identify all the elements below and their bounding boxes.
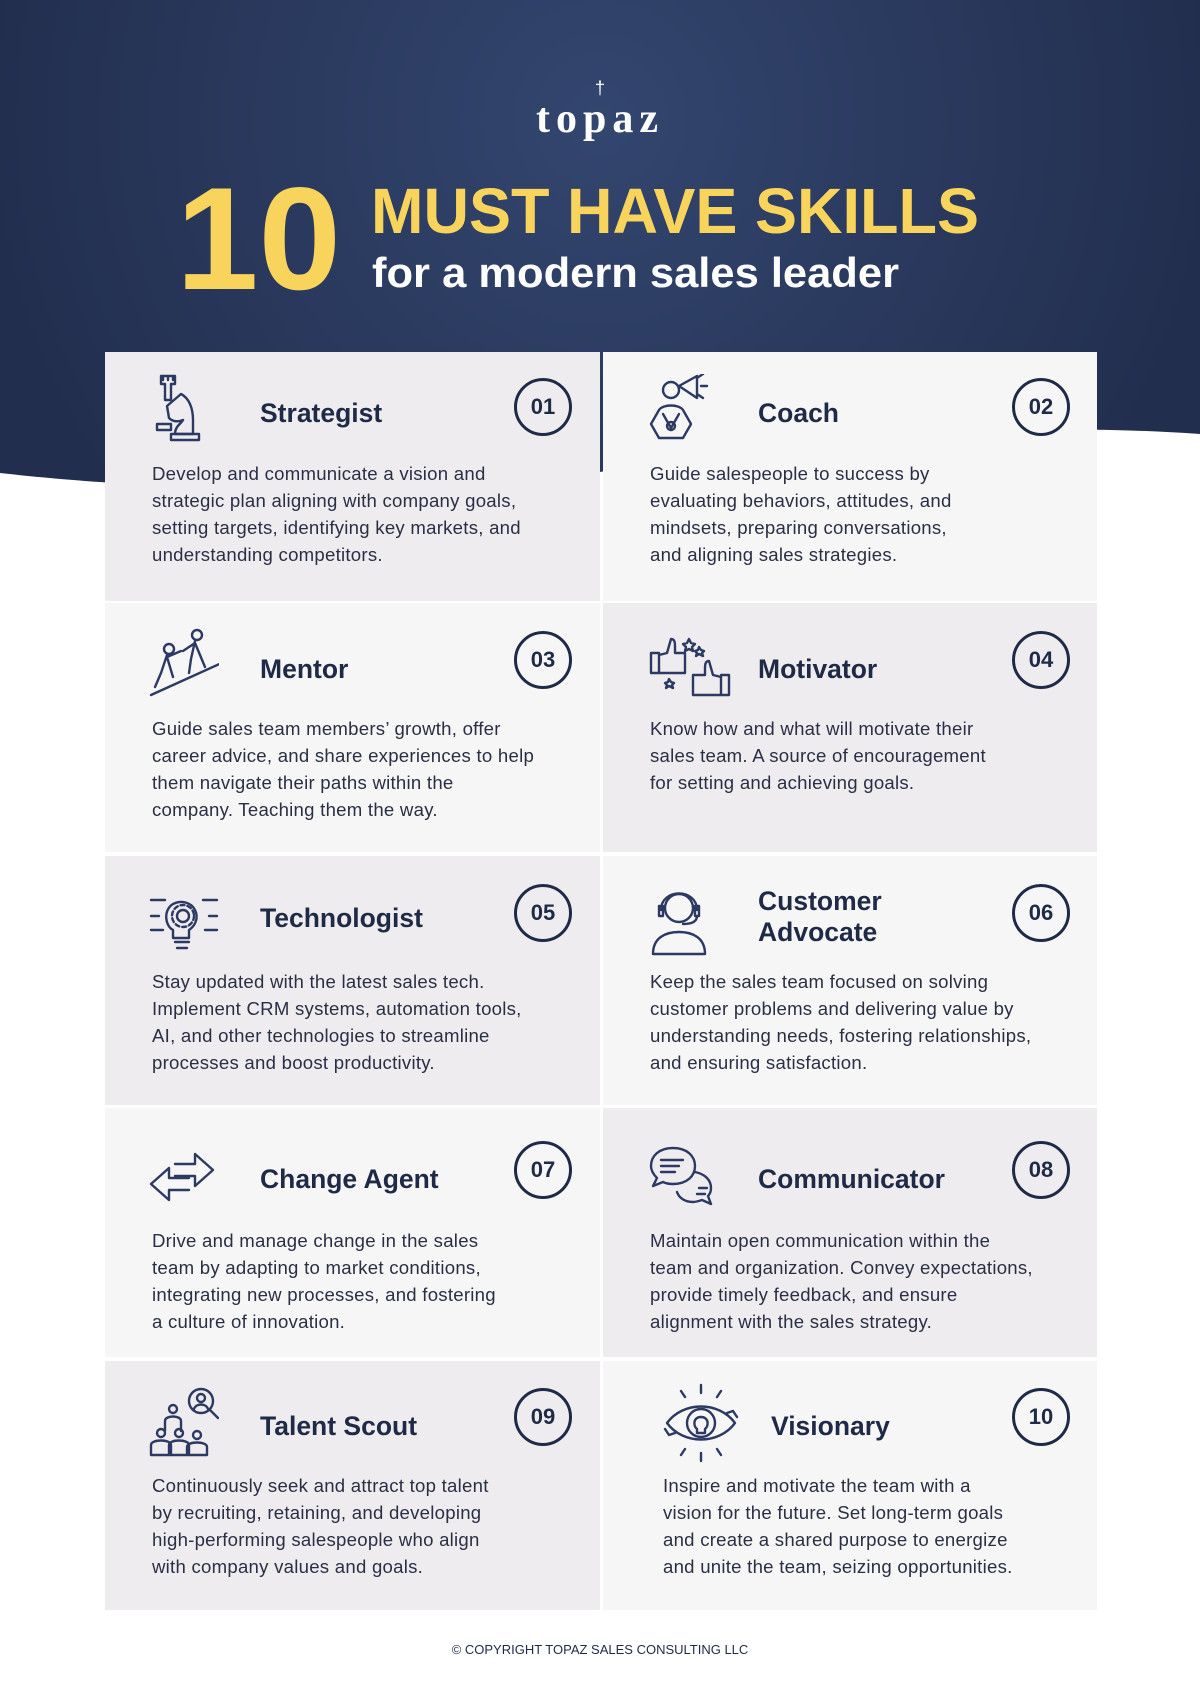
- icon: thumbs up with stars: [650, 638, 730, 696]
- logo: †: [595, 78, 605, 98]
- panel: 05 Technologist: [105, 856, 600, 1105]
- title: MUST HAVE SKILLS: [371, 175, 979, 247]
- text: Guide sales team members’ growth, offer: [152, 718, 501, 739]
- panel: 04 Motivator: [603, 603, 1097, 852]
- icon: eye with lightbulb: [664, 1384, 738, 1462]
- panel: 07 Change Agent: [105, 1108, 600, 1357]
- text: Maintain open communication within the: [650, 1230, 990, 1251]
- text: company. Teaching them the way.: [152, 799, 438, 820]
- number badge: 02: [1029, 394, 1053, 419]
- text: mindsets, preparing conversations,: [650, 517, 947, 538]
- header background: [0, 0, 1200, 482]
- title: Visionary: [771, 1411, 890, 1441]
- text: Develop and communicate a vision and: [152, 463, 486, 484]
- number badge: 05: [531, 900, 555, 925]
- text: Stay updated with the latest sales tech.: [152, 971, 484, 992]
- text: team by adapting to market conditions,: [152, 1257, 481, 1278]
- text: [152, 971, 522, 1073]
- title: [176, 160, 979, 310]
- title: for a modern sales leader: [372, 249, 899, 296]
- icon: climbing figures: [150, 628, 219, 696]
- number badge: [1012, 1141, 1070, 1199]
- icon: chess pieces: [156, 374, 200, 442]
- text: with company values and goals.: [152, 1556, 423, 1577]
- number badge: [514, 1388, 572, 1446]
- text: for setting and achieving goals.: [650, 772, 914, 793]
- panel: 10 Visionary: [603, 1361, 1097, 1610]
- text: Keep the sales team focused on solving: [650, 971, 988, 992]
- text: Drive and manage change in the sales: [152, 1230, 478, 1251]
- panel: 06 Customer Advocate: [603, 856, 1097, 1105]
- text: provide timely feedback, and ensure: [650, 1284, 957, 1305]
- text: alignment with the sales strategy.: [650, 1311, 932, 1332]
- text: them navigate their paths within the: [152, 772, 454, 793]
- number badge: [1012, 1388, 1070, 1446]
- text: and create a shared purpose to energize: [663, 1529, 1008, 1550]
- panel: 01 Strategist: [105, 352, 600, 601]
- text: evaluating behaviors, attitudes, and: [650, 490, 952, 511]
- number badge: 06: [1029, 900, 1053, 925]
- panel: 03 Mentor: [105, 603, 600, 852]
- text: setting targets, identifying key markets, and: [152, 517, 521, 538]
- number badge: 08: [1029, 1157, 1053, 1182]
- text: and ensuring satisfaction.: [650, 1052, 867, 1073]
- text: a culture of innovation.: [152, 1311, 345, 1332]
- text: processes and boost productivity.: [152, 1052, 435, 1073]
- title: Advocate: [758, 917, 877, 947]
- title: Motivator: [758, 654, 877, 684]
- text: Know how and what will motivate their: [650, 718, 973, 739]
- text: [152, 463, 521, 565]
- title: Change Agent: [260, 1164, 439, 1194]
- text: [650, 1230, 1033, 1332]
- number badge: [514, 378, 572, 436]
- title: Communicator: [758, 1164, 945, 1194]
- panel: 09 Talent Scout: [105, 1361, 600, 1610]
- text: [650, 718, 986, 793]
- title: Mentor: [260, 654, 348, 684]
- title: Strategist: [260, 398, 382, 428]
- text: team and organization. Convey expectations,: [650, 1257, 1033, 1278]
- text: by recruiting, retaining, and developing: [152, 1502, 481, 1523]
- text: strategic plan aligning with company goals,: [152, 490, 516, 511]
- number badge: [514, 631, 572, 689]
- icon: exchange arrows: [150, 1152, 214, 1202]
- logo: topaz: [536, 96, 664, 142]
- number badge: [1012, 378, 1070, 436]
- text: career advice, and share experiences to help: [152, 745, 534, 766]
- number badge: 07: [531, 1157, 555, 1182]
- text: [152, 1475, 489, 1577]
- number badge: 09: [531, 1404, 555, 1429]
- text: [663, 1475, 1013, 1577]
- text: Implement CRM systems, automation tools,: [152, 998, 522, 1019]
- text: Guide salespeople to success by: [650, 463, 930, 484]
- text: [152, 1230, 496, 1332]
- text: and aligning sales strategies.: [650, 544, 897, 565]
- number badge: 04: [1029, 647, 1053, 672]
- number badge: [1012, 631, 1070, 689]
- text: [152, 718, 534, 820]
- panel: 08 Communicator: [603, 1108, 1097, 1357]
- text: [650, 971, 1031, 1073]
- text: high-performing salespeople who align: [152, 1529, 480, 1550]
- number badge: 03: [531, 647, 555, 672]
- text: AI, and other technologies to streamline: [152, 1025, 490, 1046]
- number badge: 10: [1029, 1404, 1053, 1429]
- panel: 02 Coach: [603, 352, 1097, 601]
- text: understanding needs, fostering relationships,: [650, 1025, 1031, 1046]
- number badge: [514, 1141, 572, 1199]
- title: [758, 886, 882, 947]
- text: and unite the team, seizing opportunities.: [663, 1556, 1013, 1577]
- text: Continuously seek and attract top talent: [152, 1475, 489, 1496]
- number badge: 01: [531, 394, 555, 419]
- footer: © COPYRIGHT TOPAZ SALES CONSULTING LLC: [452, 1642, 748, 1657]
- text: [650, 463, 952, 565]
- number badge: [514, 884, 572, 942]
- icon: headset person: [652, 892, 706, 956]
- icon: lightbulb with gear: [150, 898, 218, 950]
- title: Talent Scout: [260, 1411, 417, 1441]
- text: customer problems and delivering value by: [650, 998, 1014, 1019]
- icon: coach with megaphone: [650, 374, 708, 440]
- text: integrating new processes, and fostering: [152, 1284, 496, 1305]
- title: Customer: [758, 886, 882, 916]
- text: Inspire and motivate the team with a: [663, 1475, 971, 1496]
- number badge: [1012, 884, 1070, 942]
- text: understanding competitors.: [152, 544, 383, 565]
- text: vision for the future. Set long-term goals: [663, 1502, 1003, 1523]
- icon: speech bubbles: [650, 1146, 712, 1206]
- title: Coach: [758, 398, 839, 428]
- text: sales team. A source of encouragement: [650, 745, 986, 766]
- icon: team with magnifier: [150, 1388, 219, 1456]
- title: Technologist: [260, 903, 423, 933]
